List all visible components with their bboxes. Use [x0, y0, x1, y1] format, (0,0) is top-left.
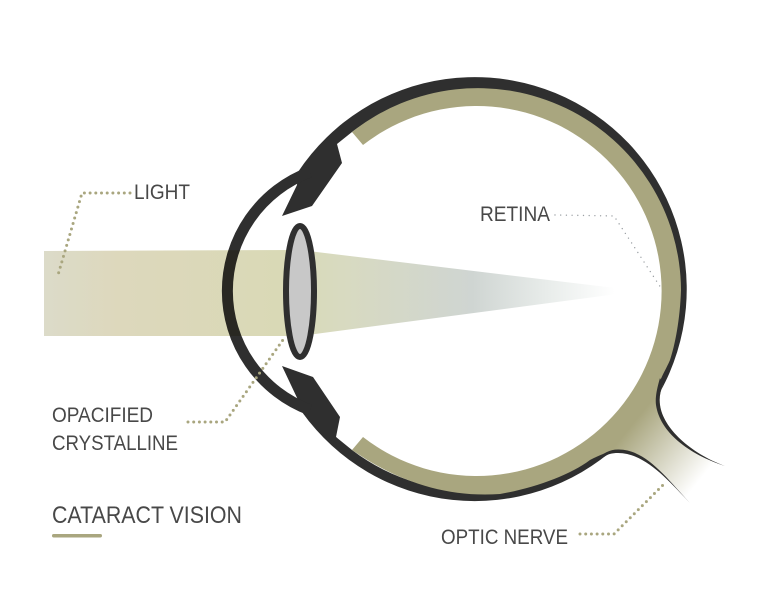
optic nerve: gradient body — [600, 380, 725, 503]
optic nerve: lower outline — [596, 449, 690, 503]
optic nerve: upper outline — [656, 378, 725, 466]
leader: optic nerve — [580, 482, 666, 534]
title underline — [52, 534, 102, 538]
label: light: LIGHT — [134, 181, 190, 204]
title: cataract vision: CATARACT VISION — [52, 502, 242, 529]
leader: retina — [555, 215, 661, 288]
cornea — [227, 172, 310, 410]
label: opacified crystalline: CRYSTALLINE — [52, 432, 178, 455]
opacified crystalline lens — [286, 226, 314, 357]
label: opacified crystalline: OPACIFIED — [52, 404, 153, 427]
label: retina: RETINA — [480, 203, 550, 226]
leader: light — [58, 193, 130, 275]
label: optic nerve: OPTIC NERVE — [441, 526, 568, 549]
sclera: dark outer wall with iris — [282, 77, 687, 501]
retina: beige inner ring — [352, 88, 681, 495]
label: opacified crystalline — [52, 404, 178, 455]
leader: opacified crystalline — [188, 337, 285, 422]
light beam — [44, 250, 640, 336]
